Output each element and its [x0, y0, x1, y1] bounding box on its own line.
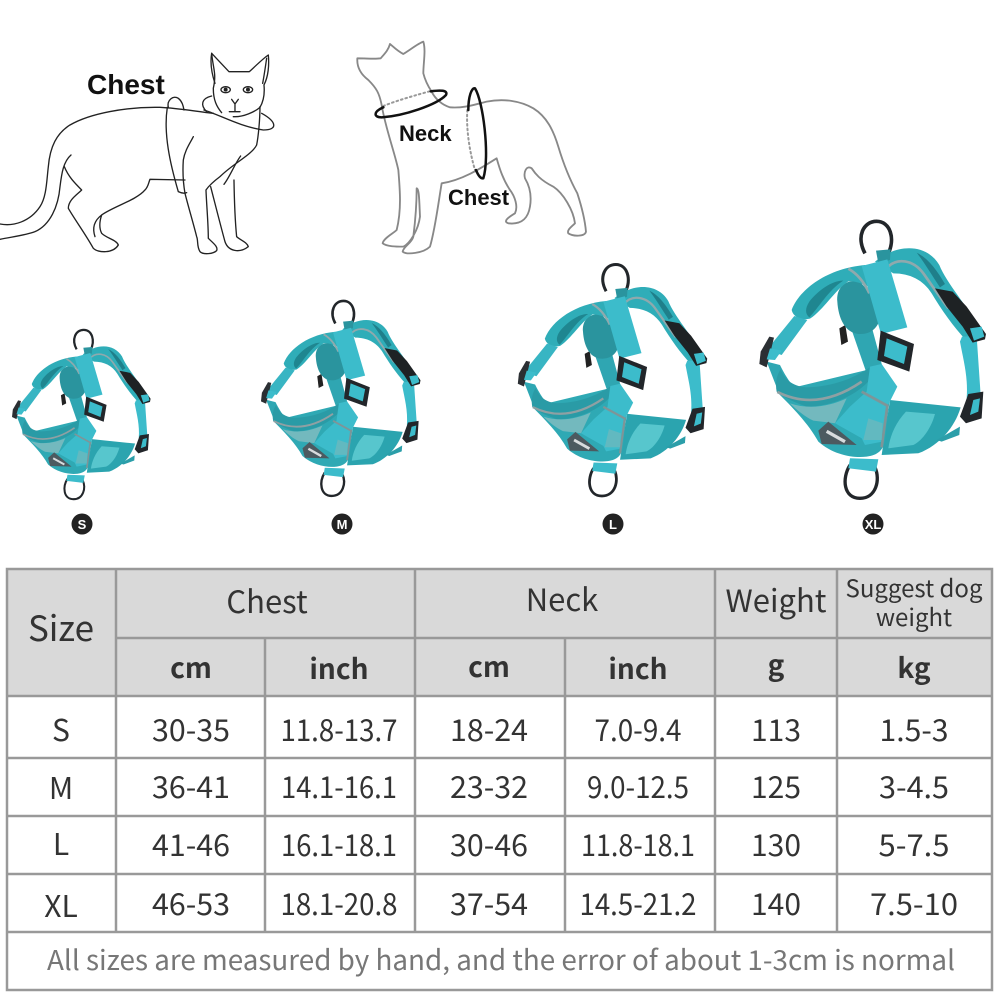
row XL: 46-53	[152, 880, 230, 924]
row S: 7.0-9.4	[594, 706, 682, 750]
row S	[52, 706, 948, 750]
row L: 11.8-18.1	[581, 821, 695, 865]
row XL: 140	[751, 880, 801, 924]
header labels: cm	[170, 647, 212, 687]
header labels: weight	[876, 598, 952, 633]
row L: 30-46	[450, 821, 528, 865]
row XL: XL	[44, 882, 78, 926]
badge S	[72, 514, 92, 534]
row S: 18-24	[450, 706, 528, 750]
row L: 16.1-18.1	[281, 821, 397, 865]
header labels: inch	[309, 648, 369, 688]
badge M: M	[337, 517, 347, 532]
label: dog neck: Neck	[399, 121, 452, 146]
row XL: 37-54	[450, 880, 528, 924]
footnote: All sizes are measured by hand, and the error of about 1-3cm is normal	[47, 938, 955, 978]
header labels: Chest	[226, 577, 308, 622]
row L: 41-46	[152, 821, 230, 865]
header labels	[28, 569, 983, 688]
row S: S	[52, 706, 70, 750]
row M: 3-4.5	[879, 763, 949, 807]
header labels: Suggest dog	[846, 569, 983, 604]
row XL	[44, 880, 958, 926]
row XL: 18.1-20.8	[280, 880, 398, 924]
harness size M	[261, 301, 420, 496]
header labels: g	[768, 644, 785, 684]
header labels: kg	[897, 647, 931, 687]
row M: 125	[751, 763, 801, 807]
header labels: inch	[608, 648, 668, 688]
badge XL: XL	[865, 517, 881, 532]
row L: 5-7.5	[878, 821, 950, 865]
header labels: Neck	[526, 575, 598, 620]
size table	[7, 569, 992, 990]
row S: 11.8-13.7	[280, 706, 398, 750]
row M: 36-41	[152, 763, 230, 807]
row M: M	[49, 764, 73, 808]
header labels: Weight	[726, 576, 827, 621]
row S: 30-35	[152, 706, 230, 750]
badge L	[602, 514, 624, 534]
badge XL	[862, 514, 884, 534]
dog measuring diagram	[357, 42, 586, 253]
row M: 23-32	[450, 763, 528, 807]
row L: L	[53, 820, 69, 864]
harness size XL	[759, 221, 986, 498]
header labels: cm	[468, 646, 510, 686]
harness size L	[518, 264, 707, 496]
badge L: L	[609, 517, 617, 532]
badge S: S	[78, 517, 87, 532]
harness size S	[12, 330, 151, 499]
row XL: 14.5-21.2	[580, 880, 696, 924]
row XL: 7.5-10	[870, 880, 958, 924]
cat measuring diagram	[0, 53, 274, 254]
row L: 130	[751, 821, 801, 865]
row M: 9.0-12.5	[587, 763, 689, 807]
header labels: Size	[28, 601, 94, 652]
row L	[53, 820, 950, 865]
row S: 1.5-3	[880, 706, 948, 750]
row M: 14.1-16.1	[281, 763, 397, 807]
row S: 113	[751, 706, 801, 750]
badge M	[332, 514, 352, 534]
row M	[49, 763, 949, 808]
label: cat chest: Chest	[87, 69, 165, 100]
label: dog chest: Chest	[448, 185, 510, 210]
